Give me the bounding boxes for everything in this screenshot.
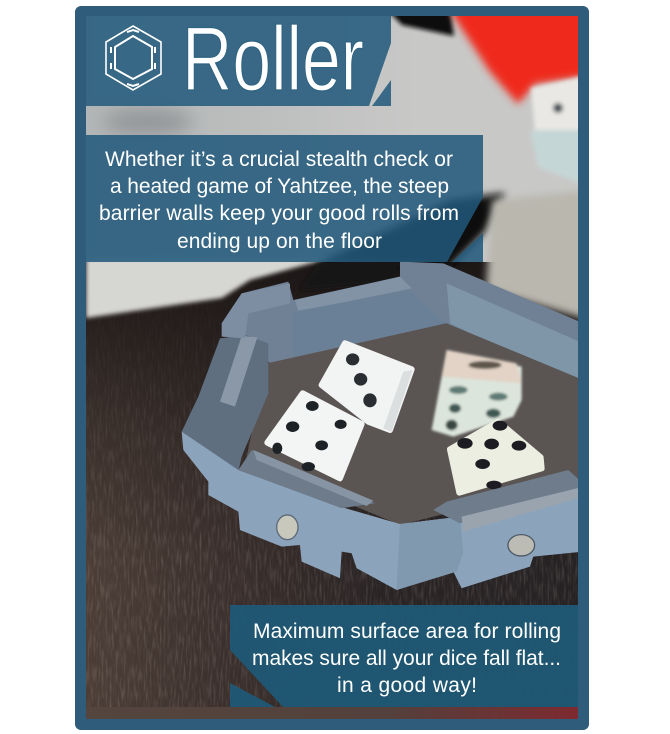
- lower banner text: [252, 620, 561, 697]
- magnet right: [508, 535, 535, 556]
- banner: title: [86, 9, 391, 110]
- banner: surface area: [230, 605, 578, 707]
- body banner shape: [86, 135, 483, 262]
- body text: [99, 148, 459, 253]
- red ball: [446, 16, 578, 108]
- body text: ending up on the floor: [177, 230, 382, 253]
- lower banner shape: [230, 605, 578, 707]
- photo: dice in hexagonal tray: [86, 6, 590, 720]
- body text: Whether it’s a crucial stealth check or: [105, 148, 453, 171]
- die: three pips: [322, 343, 413, 432]
- lower banner text: makes sure all your dice fall flat...: [252, 647, 561, 670]
- card: roller: [75, 6, 589, 730]
- card frame: [75, 6, 589, 730]
- banner: barrier walls: [86, 135, 483, 262]
- body text: a heated game of Yahtzee, the steep: [110, 175, 449, 198]
- die: six pips: [267, 393, 362, 478]
- tray: front walls: [182, 432, 583, 590]
- magnet left: [277, 515, 298, 540]
- upper blurred background: [86, 8, 590, 320]
- tray: back walls: [222, 262, 583, 383]
- table wood: [86, 262, 578, 720]
- tray: left wall: [182, 283, 290, 472]
- icon: hexagon roller: [106, 26, 161, 90]
- lower banner text: Maximum surface area for rolling: [253, 620, 561, 643]
- die: five pips cream: [450, 421, 542, 493]
- die: blurred: [432, 350, 522, 437]
- tray: floor: [247, 323, 583, 525]
- tray and dice: [182, 262, 583, 590]
- blurred white die: [530, 76, 585, 185]
- strip below the lower banner: [86, 707, 578, 719]
- title banner shape: [86, 16, 391, 106]
- title text: Roller: [182, 9, 364, 110]
- body text: barrier walls keep your good rolls from: [99, 202, 459, 225]
- lower banner text: in a good way!: [337, 674, 477, 697]
